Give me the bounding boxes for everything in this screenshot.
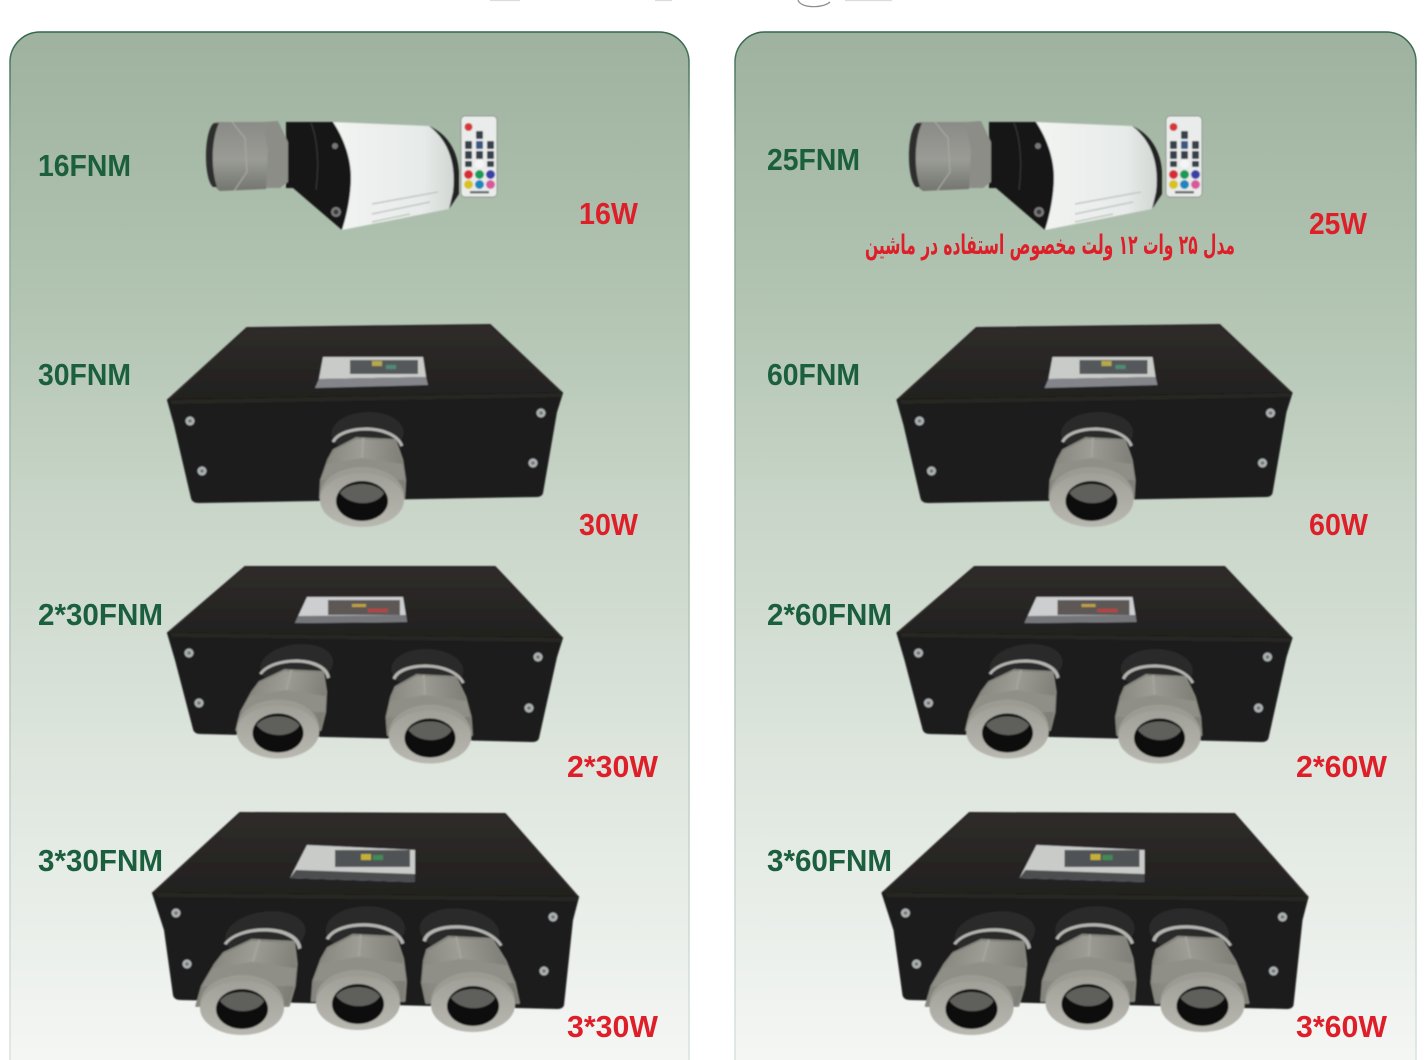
wattage: 60W: 60W <box>1309 507 1369 542</box>
label: 2*30FNM: 2*30FNM <box>38 597 163 632</box>
wattage: 3*60W: 3*60W <box>1296 1009 1388 1044</box>
label: 60FNM: 60FNM <box>767 357 860 392</box>
product: 3*60W box <box>882 813 1308 1035</box>
wattage: 30W: 30W <box>579 507 639 542</box>
label: 30FNM: 30FNM <box>38 357 131 392</box>
product: 30W box <box>168 325 562 527</box>
label: 3*60FNM: 3*60FNM <box>767 843 892 878</box>
label: 25FNM: 25FNM <box>767 142 860 177</box>
panel: right column, 25W to 3*60W models <box>735 32 1416 1060</box>
product: 3*30W box <box>153 813 578 1035</box>
wattage: 2*60W: 2*60W <box>1296 749 1388 784</box>
product: 2*30W box <box>168 567 562 763</box>
product: 25W light source <box>909 121 1162 230</box>
wattage: 2*30W: 2*30W <box>567 749 659 784</box>
product: 60W box <box>898 325 1292 527</box>
wattage: 25W: 25W <box>1309 206 1368 241</box>
label: 3*30FNM: 3*30FNM <box>38 843 163 878</box>
icon: 25W remote control <box>1166 116 1202 197</box>
right panel background <box>735 32 1416 1060</box>
panel: left column, 16W to 3*30W models <box>10 32 689 1060</box>
wattage: 3*30W: 3*30W <box>567 1009 659 1044</box>
product: 16W light source <box>206 121 459 230</box>
product: 2*60W box <box>898 567 1292 763</box>
cropped heading fragment at top edge <box>490 0 892 7</box>
note: 25W 12V model for car use: مدل ۲۵ وات ۱۲ ولت مخصوص استفاده در ماشین <box>865 230 1235 261</box>
label: 2*60FNM: 2*60FNM <box>767 597 892 632</box>
wattage: 16W: 16W <box>579 196 639 231</box>
label: 16FNM: 16FNM <box>38 148 131 183</box>
icon: 16W remote control <box>461 116 497 197</box>
left panel background <box>10 32 689 1060</box>
